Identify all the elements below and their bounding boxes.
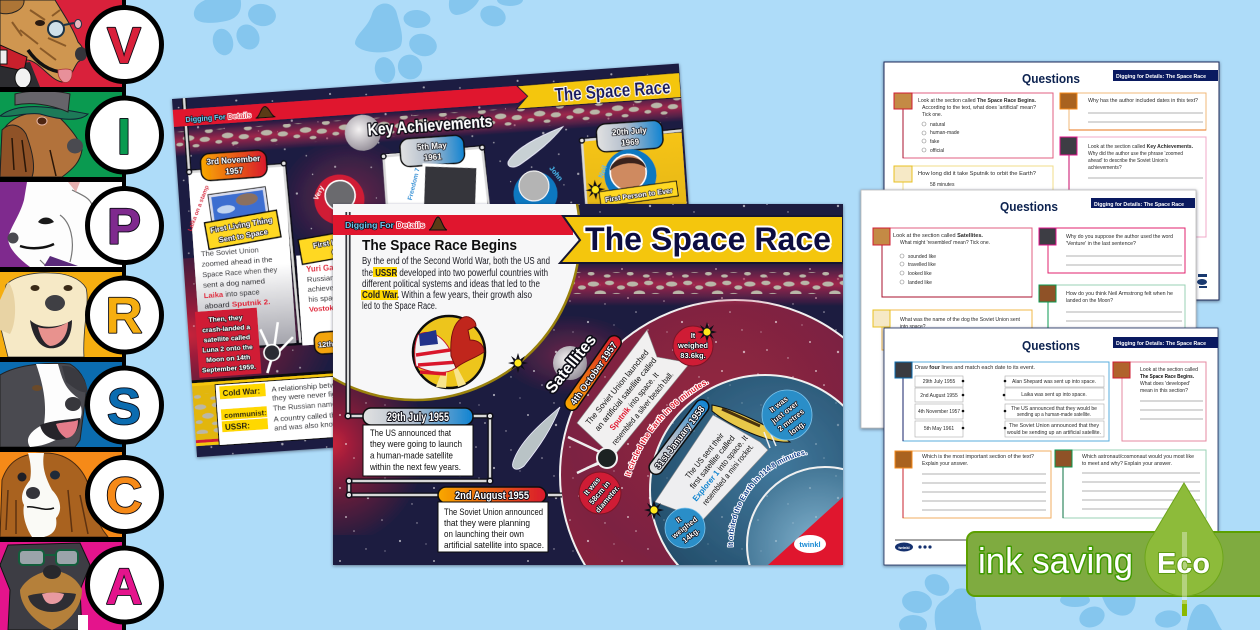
question 3 box: Explain your answer. [922, 461, 968, 467]
divider [0, 87, 122, 92]
sheet title: Questions [1022, 71, 1080, 86]
glossary term: Cold War [219, 382, 333, 402]
question 2 box: into space? [900, 324, 926, 330]
ribbon card: Sputnik: Sputnik into space. It [608, 370, 661, 432]
question sheet 2 [861, 190, 1196, 428]
icon: Luna 2 probe [260, 321, 295, 373]
dog: predict white spitz [8, 182, 122, 267]
matching question box: The Soviet Union announced that they [1009, 423, 1100, 429]
question 1 box: human-made [930, 130, 960, 136]
body text: Laika: sent a dog named [203, 276, 265, 290]
question 3 box: Why has the author included dates in this text? [1088, 98, 1198, 104]
body text: Laika: Space Race when they [202, 265, 278, 279]
glossary strip [192, 370, 333, 446]
glossary term: USSR [222, 412, 333, 432]
text card: 29th July 1955: within the next few years. [369, 462, 461, 473]
star burst [508, 353, 528, 373]
fact bubble: 14kg: It [674, 514, 684, 525]
glossary term: Cold War: they were never fighting directly. [272, 386, 381, 403]
ribbon card: Explorer 1: Explorer 1 into space. It [691, 433, 750, 503]
intro body text: the USSR developed into two powerful countries with [362, 268, 548, 279]
poster title: The Space Race [554, 77, 671, 105]
question 2 box: 58 minutes [930, 182, 955, 188]
panel: Yuri Gagarin [296, 174, 365, 355]
icon: Explorer rocket [712, 405, 790, 448]
text card: 2nd August 1955: The Soviet Union announced [444, 507, 543, 517]
date pill: 1957 [225, 166, 244, 176]
panel: Yuri Gagarin: Russian cosmonaut [307, 270, 375, 284]
matching question box: The US announced that they would be [1011, 406, 1097, 412]
question 5 box: Why do you suppose the author used the word [1066, 234, 1173, 240]
heading: Key Achievements: Key Achievements [367, 112, 493, 139]
back poster: Key Achievements [172, 64, 704, 457]
panel: 5th May 1961: Freedom 7 [407, 167, 422, 201]
ribbon card: Explorer 1: resembled a mini rocket. [701, 442, 755, 507]
sheet footer: twinkl [898, 545, 910, 550]
front poster: The Space Race Begins [330, 202, 846, 568]
red header band [173, 85, 528, 127]
fact bubble: 58cm [578, 471, 621, 515]
digging for details logo [345, 217, 447, 230]
fact bubble: 2 metres [762, 390, 812, 442]
question 1 box: According to the text, what does 'artificial' mean? [922, 105, 1036, 111]
dog: vocabulary airedale [0, 0, 87, 88]
letter circle V: V [107, 17, 141, 74]
matching question box: Alan Shepard was sent up into space. [1012, 379, 1096, 385]
panel: Yuri Gagarin: Orbit [331, 245, 351, 257]
fact bubble: 2 metres: 2 metres [776, 407, 806, 433]
panel: Yuri Gagarin: Very [313, 185, 326, 201]
silver frame: left timeline [345, 212, 562, 498]
dog: retrieve golden retriever [0, 273, 87, 357]
date pill: 4th October 1957: 4th October 1957 [569, 340, 620, 407]
ribbon card: Sputnik [577, 330, 690, 457]
body text: Laika: zoomed ahead in the [201, 255, 273, 269]
question 2 box [873, 310, 1032, 350]
matching question box: Draw four lines and match each date to its event. [915, 365, 1035, 371]
arc label: Laika stamp: Laika on a stamp [188, 184, 211, 232]
divider [0, 267, 122, 272]
colour band: V red [0, 0, 122, 87]
sheet header tag [1091, 198, 1195, 208]
fact bubble: 58cm: diameter. [593, 484, 621, 515]
intro body text: Cold War. Within a few years, their growth also [362, 290, 532, 301]
fact bubble: 58cm: 58cm in [587, 479, 612, 506]
panel: 20th July 1969: 20th July [612, 126, 648, 137]
glossary term: Cold War: A relationship between two countries where [271, 375, 418, 394]
question 6 box [1039, 285, 1185, 345]
badge text: ink saving [978, 540, 1133, 581]
question 4 box: achievements? [1088, 165, 1122, 171]
question 1 box [873, 228, 1032, 297]
fact bubble: 14kg: 14kg. [681, 526, 701, 545]
intro body text: By the end of the Second World War, both the US and [362, 256, 550, 267]
sheet title: Questions [1022, 338, 1080, 353]
sheet header tag: Digging for Details: The Space Race [1094, 202, 1184, 208]
body text: Laika: The Soviet Union [201, 245, 259, 258]
body text: Laika: Laika into space [203, 287, 260, 300]
VIPERS sidebar with dog characters [0, 0, 162, 630]
panel: Yuri Gagarin: Yuri Gagarin [306, 262, 353, 274]
glossary term: Cold War: Cold War: [222, 387, 260, 398]
date pill: 31st January 1958: 31st January 1958 [653, 404, 707, 472]
section heading: The Space Race Begins [362, 237, 517, 254]
letter circle C [88, 458, 162, 532]
fact bubble: 14kg [663, 507, 706, 549]
text card: 2nd August 1955: on launching their own [444, 529, 524, 539]
ribbon card: Explorer 1 [655, 415, 768, 523]
text card: 29th July 1955 [363, 425, 473, 476]
sheet footer [895, 540, 1218, 552]
asteroid stone band [566, 264, 843, 305]
ribbon card: Sputnik: an artificial satellite called [593, 356, 659, 433]
question 4 box: Why did the author use the phrase 'zoomed [1088, 151, 1183, 157]
digging for details logo: Digging For Details [185, 111, 252, 124]
yellow title banner [560, 216, 843, 263]
letter circle S [88, 368, 162, 442]
fact bubble: 2 metres: just over [769, 399, 800, 426]
question 1 box: fake [930, 139, 940, 145]
text card: 2nd August 1955: artificial satellite into space. [444, 540, 544, 550]
question 2 box: How long did it take Sputnik to orbit the Earth? [918, 171, 1036, 177]
matching question box: would be sending up an artificial satellite. [1007, 430, 1101, 436]
text card: 2nd August 1955 [438, 502, 548, 552]
colour band: P purple [0, 182, 122, 267]
letter circle I [88, 98, 162, 172]
ribbon card: Explorer 1: The US sent their [684, 431, 726, 480]
question 1 box [894, 93, 1053, 158]
red callout: Luna 2: satellite called [203, 334, 250, 344]
question 1 box: sounded like [908, 254, 936, 260]
ribbon card: Sputnik: The Soviet Union launched [584, 348, 651, 427]
matching question box: Laika was sent up into space. [1021, 392, 1087, 398]
panel: 20th July 1969: Neil [598, 165, 609, 179]
red callout: Luna 2: Then, they [208, 315, 243, 324]
glossary term: communist: The Russian name for a system of government. [273, 393, 433, 413]
big maroon orbit [559, 299, 843, 565]
colour band: C orange [0, 452, 122, 537]
eco ink saving badge [967, 483, 1260, 616]
fact bubble: 83.6kg: It [691, 331, 696, 340]
letter circle A: A [106, 558, 142, 615]
matching question box [895, 362, 1109, 441]
question sheet 3 [884, 328, 1218, 565]
arc text: 114.8 minutes: It orbited the Earth in 114.8 minutes. [726, 450, 808, 548]
ribbon card: Explorer 1: first satellite called [688, 433, 737, 491]
letter circle A [88, 548, 162, 622]
question 2 box: The Space Race Begins. [1140, 374, 1195, 380]
question 4 box: Look at the section called Key Achievements. [1088, 144, 1194, 150]
yellow label: first living thing: First Living Thing [210, 215, 274, 235]
text card: 29th July 1955: they were going to launch [370, 439, 462, 450]
digging for details logo [185, 106, 276, 124]
heading: Satellites: Satellites [543, 332, 600, 397]
sheet title: Questions [1000, 199, 1058, 214]
divider [0, 177, 122, 182]
date pill: 29th July 1955 [363, 408, 473, 425]
letter circle V [88, 8, 162, 82]
body text: Laika: aboard Sputnik 2. [204, 297, 271, 311]
matching question box: 4th November 1957 [918, 409, 960, 415]
fact bubble: 83.6kg: 83.6kg. [680, 351, 706, 360]
question 4 box: Which astronaut/cosmonaut would you most like [1082, 454, 1194, 460]
letter circle R [88, 278, 162, 352]
divider [0, 537, 122, 542]
intro body text: different political systems and ideas that led to the [362, 279, 540, 290]
comet [513, 407, 560, 469]
matching question box: 29th July 1955 [923, 379, 955, 385]
text card: 29th July 1955: a human-made satellite [370, 450, 453, 462]
fact bubble: 2 metres: It was [768, 394, 790, 414]
question 3 box: Which is the most important section of the text? [922, 454, 1034, 460]
question 1 box: landed like [908, 280, 932, 286]
white intro circle [333, 204, 580, 402]
date pill [200, 150, 268, 181]
sheet header tag [1113, 70, 1218, 81]
glossary term: communist [220, 402, 333, 420]
letter circle P [88, 188, 162, 262]
question 4 box [1060, 137, 1206, 237]
yellow title banner [515, 73, 681, 109]
letter circle R: R [106, 287, 142, 344]
glossary term: USSR: A country called the Soviet Union [273, 407, 385, 424]
date pill: 2nd August 1955: 2nd August 1955 [455, 490, 529, 502]
letter circle I: I [117, 108, 131, 165]
glossary term: communist: communist: [224, 408, 267, 420]
dog: infer bloodhound [0, 91, 88, 177]
question 4 box: ahead' to describe the Soviet Union's [1088, 158, 1168, 164]
starfield [333, 204, 843, 565]
question 1 box: Look at the section called Satellites. [893, 233, 984, 239]
question 5 box [1039, 228, 1185, 273]
ribbon card: Sputnik: resembled a silver beach ball. [610, 370, 675, 447]
glossary term: USSR: USSR: [225, 421, 250, 432]
question 1 box: looked like [908, 271, 932, 277]
matching question box: 5th May 1961 [924, 426, 954, 432]
sheet header tag: Digging for Details: The Space Race [1116, 341, 1206, 347]
sheet header tag: Digging for Details: The Space Race [1116, 74, 1206, 80]
question 4 box: to meet and why? Explain your answer. [1082, 461, 1172, 467]
text card: 2nd August 1955: that they were planning [444, 518, 530, 528]
panel: 3rd November 1957 [178, 91, 303, 378]
panel: Yuri Gagarin: achieved orbit on [307, 281, 366, 294]
main title: The Space Race [585, 221, 831, 257]
question 1 box: Look at the section called The Space Race Begins. [918, 98, 1037, 104]
panel: 5th May 1961 [380, 134, 490, 204]
panel: Yuri Gagarin: 12th April 1961 [318, 337, 371, 349]
blue orbit [649, 374, 843, 565]
question 1 box: natural [930, 122, 945, 128]
question 1 box: official [930, 148, 944, 154]
red corner triangle with twinkl logo: twinkl [799, 540, 821, 549]
panel: 5th May 1961: 1961 [424, 152, 442, 163]
footer icon [1197, 274, 1207, 288]
question 1 box: travelled like [908, 262, 936, 268]
question 2 box: What does 'developed' [1140, 381, 1190, 387]
question 6 box: How do you think Neil Armstrong felt when he [1066, 291, 1173, 297]
panel: John Glenn photo [513, 166, 562, 204]
panel: John Glenn photo: John [547, 165, 563, 183]
panel: Yuri Gagarin: First Human in [312, 232, 366, 250]
question 2 box: What was the name of the dog the Soviet Union sent [900, 317, 1021, 323]
icon: USA vs USSR arm badge [413, 316, 485, 388]
inner earth circle [746, 466, 843, 565]
yellow label: first living thing [204, 210, 281, 249]
letter circle C: C [106, 467, 142, 524]
date pill: 29th July 1955: 29th July 1955 [387, 412, 449, 424]
colour band: S blue [0, 362, 122, 447]
icon: Sputnik satellite [568, 437, 617, 473]
question 2 box [1113, 362, 1206, 441]
yellow label: first living thing: Sent to Space [218, 227, 269, 245]
question 3 box [1060, 93, 1206, 130]
colour band: A pink [0, 542, 122, 630]
question sheet 1 [884, 62, 1219, 300]
asteroid stone band [174, 98, 682, 156]
fact bubble: 83.6kg [673, 326, 713, 366]
letter circle P: P [107, 198, 141, 255]
fact bubble: 83.6kg: weighed [677, 341, 708, 350]
red header band [333, 215, 573, 235]
intro body text: led to the Space Race. [362, 301, 437, 312]
arc text: 96 minutes: It circled the Earth in 96 minutes. [624, 380, 710, 478]
stamp picture [208, 187, 269, 224]
badge bar [967, 532, 1260, 596]
star burst [697, 322, 717, 342]
moon [344, 114, 382, 152]
question 2 box: Look at the section called [1140, 367, 1198, 373]
dog: sequence border collie [0, 363, 88, 447]
date pill: 2nd August 1955 [438, 487, 546, 503]
question 1 box: What might 'resembled' mean? Tick one. [900, 240, 990, 246]
panel: Yuri Gagarin: his spacecraft [308, 292, 356, 304]
digging for details logo: Digging For Details [345, 220, 425, 230]
text card: 29th July 1955: The US announced that [370, 428, 451, 439]
red callout: Luna 2 [195, 308, 261, 378]
date pill: 3rd November [206, 154, 261, 167]
colour band: I green [0, 92, 122, 177]
panel: 20th July 1969 [578, 120, 687, 204]
fact bubble: 2 metres: long. [787, 419, 807, 437]
question 4 box [1055, 450, 1206, 518]
colour band: R yellow [0, 272, 122, 357]
leaf label: Eco [1157, 548, 1210, 580]
sheet header tag [1113, 337, 1218, 348]
question 2 box [894, 166, 1053, 206]
glossary term: USSR: and was also known as Russia. [274, 416, 380, 433]
fact bubble: 58cm: It was [582, 475, 602, 497]
letter circle S: S [107, 378, 141, 435]
question 2 box: mean in this section? [1140, 388, 1188, 394]
panel: 20th July 1969: First Person to Ever [604, 186, 673, 204]
divider [0, 447, 122, 452]
question 3 box [895, 451, 1051, 518]
icon: leaf [1145, 483, 1223, 616]
dog: authors rottweiler [0, 543, 90, 630]
red corner triangle with twinkl logo [768, 497, 843, 565]
red callout: Luna 2: Luna 2 onto the [202, 344, 253, 354]
panel: Yuri Gagarin: Vostok 1. [309, 303, 342, 314]
question 5 box: 'Venture' in the last sentence? [1066, 241, 1136, 247]
question 1 box: Tick one. [922, 112, 942, 118]
matching question box: 2nd August 1955 [920, 393, 958, 399]
matching question box: sending up a human-made satellite. [1017, 412, 1091, 418]
intro body text [361, 256, 550, 312]
vertical black rail [122, 0, 126, 630]
comet [506, 127, 565, 167]
panel: 5th May 1961: 5th May [417, 141, 448, 152]
red callout: Luna 2: crash-landed a [202, 324, 251, 334]
red callout: Luna 2: September 1959. [202, 364, 256, 375]
star burst [644, 500, 664, 520]
body text: Laika [200, 248, 278, 309]
moon [553, 346, 587, 380]
panel: 20th July 1969: 1969 [621, 137, 640, 148]
divider [0, 357, 122, 362]
question 6 box: landed on the Moon? [1066, 298, 1113, 304]
red callout: Luna 2: Moon on 14th [206, 354, 251, 364]
fact bubble: 14kg: weighed [669, 515, 700, 541]
dog: clarify cavalier spaniel [0, 453, 108, 537]
